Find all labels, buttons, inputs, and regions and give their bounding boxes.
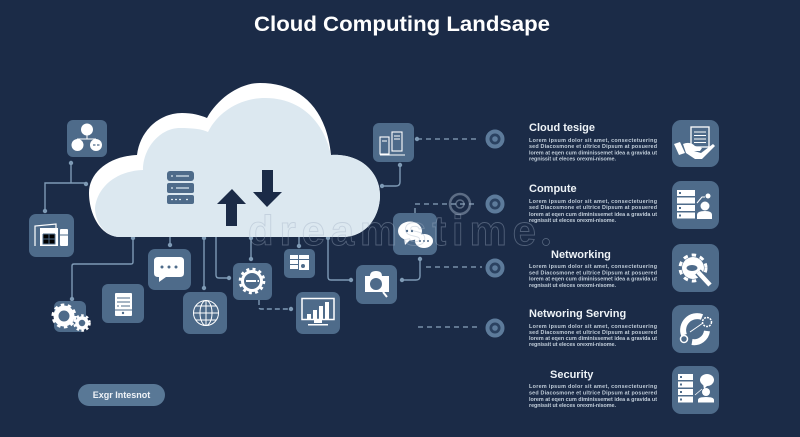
- text block: Cloud tesige: Cloud tesige: [529, 122, 595, 134]
- icon tile: server and user: [672, 181, 719, 229]
- text block: Cloud tesige: sed Diacosmone et ultrice Dipsum at posuered: [529, 144, 657, 150]
- text block: Security: lorem at eqen cum diminissemet idea a gravida ut: [529, 397, 657, 403]
- step marker 4: [488, 320, 502, 336]
- title: Cloud Computing Landsape: [254, 13, 550, 36]
- text block: Networing Serving: sed Diacosmone et ultrice Dipsum at posuered: [529, 330, 657, 336]
- step marker 3: [488, 260, 502, 276]
- tile: chat bubbles: [393, 213, 437, 255]
- text block: Compute: regnissit ut eleces orexmi-nisome.: [529, 218, 616, 224]
- text block: Cloud tesige: regnissit ut eleces orexmi-nisome.: [529, 156, 616, 162]
- button: [78, 384, 165, 406]
- text block: Networing Serving: [529, 308, 657, 348]
- step marker 2: [488, 196, 502, 212]
- tile: globe: [183, 292, 227, 334]
- tile: camera search: [356, 265, 397, 304]
- text block: Networking: Networking: [551, 249, 611, 261]
- text block: Security: sed Diacosmone et ultrice Dipsum at posuered: [529, 390, 657, 396]
- tile: organisation: [67, 120, 107, 157]
- text block: Cloud tesige: Lorem ipsum dolor sit amet, consectetuering: [529, 138, 657, 144]
- tile: monitor chart: [296, 292, 340, 334]
- tile: servers: [373, 123, 414, 162]
- tile: folder and table: [29, 214, 74, 257]
- text block: Security: Lorem ipsum dolor sit amet, consectetuering: [529, 384, 657, 390]
- icon tile: server chat user: [672, 366, 719, 414]
- text block: Compute: Lorem ipsum dolor sit amet, consectetuering: [529, 199, 657, 205]
- text block: Compute: [529, 183, 657, 224]
- text block: Networking: [529, 249, 657, 289]
- icon: server stack: [167, 171, 194, 204]
- text block: Security: Security: [550, 369, 594, 381]
- icon: download arrow: [253, 170, 282, 207]
- text block: Security: regnissit ut eleces orexmi-nisome.: [529, 403, 616, 409]
- text block: Networking: lorem at eqen cum diminissemet idea a gravida ut: [529, 276, 657, 282]
- step marker 1: [488, 132, 502, 146]
- tile: gear minus: [233, 263, 272, 300]
- text block: Networing Serving: Lorem ipsum dolor sit amet, consectetuering: [529, 324, 657, 330]
- text block: Security: [529, 369, 657, 409]
- text block: Networking: sed Diacosmone et ultrice Dipsum at posuered: [529, 270, 657, 276]
- text block: Networing Serving: lorem at eqen cum diminissemet idea a gravida ut: [529, 336, 657, 342]
- connector lines: [43, 137, 482, 327]
- text block: Cloud tesige: lorem at eqen cum diminissemet idea a gravida ut: [529, 150, 657, 156]
- text block: Networking: Lorem ipsum dolor sit amet, consectetuering: [529, 264, 657, 270]
- tile: speech bubble: [148, 249, 191, 290]
- text block: Compute: sed Diacosmone et ultrice Dipsum at posuered: [529, 205, 657, 211]
- icon tile: hand holding document: [672, 120, 719, 167]
- icon tile: gear and wrench: [672, 244, 719, 292]
- watermark: dreamstime: [248, 207, 536, 254]
- tile: gears: [53, 301, 90, 332]
- icon: upload arrow: [217, 189, 246, 226]
- text block: Networing Serving: Networing Serving: [529, 308, 626, 320]
- text block: Compute: lorem at eqen cum diminissemet idea a gravida ut: [529, 212, 657, 218]
- text block: Networing Serving: regnissit ut eleces orexmi-nisome.: [529, 342, 616, 348]
- icon tile: ring and gears: [672, 305, 719, 353]
- tile: dashboard: [284, 249, 315, 278]
- text block: Networking: regnissit ut eleces orexmi-nisome.: [529, 283, 616, 289]
- button: Exgr Intesnot: [93, 390, 150, 400]
- text block: Cloud tesige: [529, 122, 657, 162]
- tile: document device: [102, 284, 144, 323]
- text block: Compute: Compute: [529, 183, 577, 195]
- cloud: [89, 83, 380, 237]
